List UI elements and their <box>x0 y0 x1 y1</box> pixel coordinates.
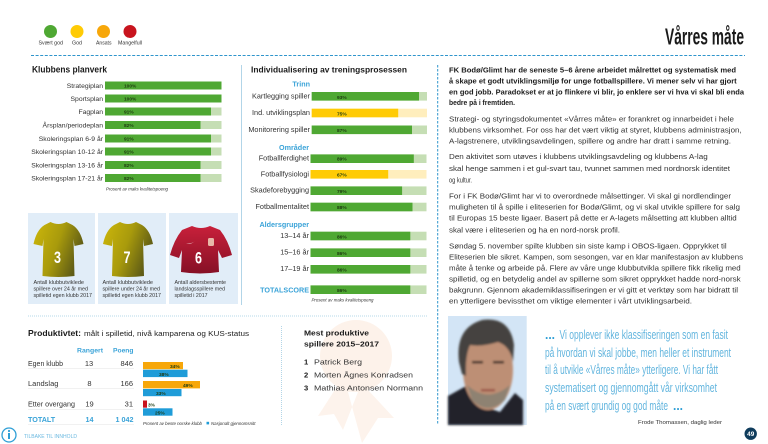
text block: paragraph 4: muligheten til å spille i eliteserien for Bodø/Glimt, og vi skal utvikle spillere for salg <box>449 204 740 212</box>
panel: shirt 3 <box>28 213 95 304</box>
icon: rosette <box>318 320 394 443</box>
bar chart: aldersgrupper: 15–16 år <box>280 248 310 256</box>
caption: landslagsspillere med <box>174 286 225 292</box>
icon: info back link: TILBAKE TIL INNHOLD <box>24 434 77 440</box>
caption <box>102 280 161 299</box>
player list: Morten Ågnes Konradsen <box>314 370 413 380</box>
player list <box>304 358 423 392</box>
bar chart: trinn: Trinn <box>292 80 310 88</box>
quote: ... <box>545 327 555 342</box>
bar chart: områder: 67% <box>337 172 347 178</box>
page number: 49 <box>747 431 755 438</box>
bar chart: productivity: 33% <box>156 391 166 397</box>
text block: intro: en god jobb. Paradokset er at jo flinkere vi blir, jo enklere ser vi hva vi skal bli enda <box>449 89 744 96</box>
legend note: Nasjonalt gjennomsnitt <box>211 421 256 426</box>
icon: red shirt 6: 6 <box>195 250 202 268</box>
bar chart: planverk: 100% <box>124 96 137 102</box>
table: TOTALT <box>28 415 56 424</box>
bar chart: planverk: 91% <box>124 109 134 115</box>
heading: spillere 2015–2017 <box>304 340 379 348</box>
quote: på en svært grundig og god måte <box>545 398 668 413</box>
table: 8 <box>87 379 92 388</box>
panel: Produktivitet: målt i spilletid, nivå kamparena og KUS-status <box>84 329 249 338</box>
bar chart: totalscore: TOTALSCORE <box>260 285 309 294</box>
legend note <box>143 421 256 426</box>
bar chart: trinn: Monitorering spiller <box>248 125 311 134</box>
bar chart: planverk: 82% <box>124 163 134 169</box>
table: 166 <box>120 379 133 388</box>
panel: Klubbens planverk <box>31 64 222 192</box>
table: Etter overgang <box>28 400 75 408</box>
bar chart: områder: Fotballferdighet <box>259 154 309 162</box>
note: Prosent av maks kvalitetspoeng <box>106 186 169 192</box>
bar chart: områder: Fotballmentalitet <box>255 202 309 211</box>
page number <box>744 428 757 440</box>
text block: paragraph 4: skal være i eliteserien og ha en nord-norsk profil. <box>449 227 620 234</box>
table: 19 <box>85 400 94 408</box>
caption: Antall aldersbestemte <box>174 280 226 286</box>
bar chart: aldersgrupper: 86% <box>337 234 347 240</box>
icon: yellow shirt 7: 7 <box>124 249 130 267</box>
bar chart: områder: Skadeforebygging <box>250 186 309 194</box>
player list: 2 <box>304 370 308 380</box>
bar chart: planverk: 82% <box>124 176 134 182</box>
note: Prosent av maks kvalitetspoeng <box>312 298 374 302</box>
caption: spilletid egen klubb 2017 <box>34 293 92 299</box>
bar chart: planverk: Strategiplan <box>67 83 103 90</box>
text block: paragraph 5: Søndag 5. november spilte klubben sin siste kamp i OBOS-ligaen. Opprykket til <box>449 243 727 250</box>
bar chart: planverk: 91% <box>124 136 134 142</box>
table: 1 042 <box>116 415 134 424</box>
text block: paragraph 3 <box>449 154 730 184</box>
player list: Patrick Berg <box>314 358 362 366</box>
quote: ... <box>673 398 683 413</box>
quote <box>545 327 731 413</box>
text block: paragraph 2: A-lagstrenere, utviklingsavdelingen, spillere og andre har dratt i samme retning. <box>449 139 731 146</box>
legend: Svært god <box>38 41 63 47</box>
text block: intro: bedre på i fremtiden. <box>449 99 515 107</box>
caption <box>174 280 226 299</box>
legend <box>38 25 142 47</box>
table: Rangert <box>77 348 104 354</box>
text block: paragraph 5 <box>449 243 744 305</box>
bar chart: trinn: 87% <box>337 128 347 134</box>
caption: spilletid egen klubb 2017 <box>102 293 161 299</box>
panel: shirt 6 <box>169 213 238 304</box>
bar chart: planverk: 100% <box>124 83 137 89</box>
text block: paragraph 5: Eliteserien ble sikret. Kampen, som sesongen, var en klar manifestasjon av klubbens <box>449 254 744 261</box>
bar chart: områder: 88% <box>337 205 347 211</box>
table: Landslag <box>28 379 58 388</box>
legend: Mangelfull <box>118 41 142 47</box>
panel: shirt 7 <box>98 213 166 304</box>
panel: Mest produktive spillere <box>304 328 423 392</box>
bar chart: aldersgrupper: 86% <box>337 268 347 274</box>
bar chart: trinn: 75% <box>337 112 347 118</box>
bar chart: planverk <box>31 82 222 182</box>
bar chart: productivity: 3% <box>148 402 156 408</box>
bar chart: planverk: 91% <box>124 149 134 155</box>
table: 31 <box>125 400 133 408</box>
bar chart: totalscore: 86% <box>337 288 347 294</box>
panel: Produktivitet <box>28 329 256 426</box>
bar chart: aldersgrupper: Aldersgrupper <box>259 220 309 229</box>
bar chart: planverk: Skoleringsplan 17-21 år <box>31 174 104 182</box>
bar chart: trinn: Ind. utviklingsplan <box>252 108 310 117</box>
bar chart: aldersgrupper <box>259 220 426 274</box>
bar chart: planverk: Skoleringsplan 6-9 år <box>39 135 104 143</box>
heading: Produktivtet: Produktivtet: <box>28 329 81 338</box>
bar chart: områder <box>250 143 426 211</box>
bar chart: planverk: Fagplan <box>78 109 103 116</box>
icon: info back link <box>2 428 77 442</box>
caption: spillere under 24 år med <box>102 286 160 292</box>
bar chart: productivity: 49% <box>183 383 193 389</box>
panel: Individualisering av treningsprosessen <box>248 64 427 302</box>
caption: spilletid i 2017 <box>174 293 208 299</box>
bar chart: trinn: 93% <box>337 95 347 101</box>
heading: Mest produktive <box>304 328 369 338</box>
bar chart: områder: 89% <box>337 157 347 163</box>
bar chart: productivity: 34% <box>170 364 180 370</box>
text block: paragraph 5: måte å tenke og arbeide på. Flere av våre unge klubbutvikla spillere fikk rikelig med <box>449 264 741 272</box>
bar chart: productivity: 25% <box>155 410 165 416</box>
bar chart: trinn: Kartlegging spiller <box>252 92 311 100</box>
legend: God <box>72 41 82 47</box>
text block: paragraph 5: en ytterligere bevissthet om viktige elementer i vårt utviklingsarbeid. <box>449 297 692 305</box>
text block: intro <box>449 66 744 107</box>
bar chart: planverk: Sportsplan <box>70 96 103 103</box>
bar chart: totalscore <box>260 285 426 294</box>
bar chart: aldersgrupper: 86% <box>337 251 347 257</box>
text block: paragraph 4: For i FK Bodø/Glimt har vi to overordnede målsettinger. Vi skal gi nordlendinger <box>449 192 732 200</box>
bar chart: områder: Områder <box>279 143 309 152</box>
heading: Individualisering: Individualisering av treningsprosessen <box>251 64 407 74</box>
text block: paragraph 2 <box>449 116 742 146</box>
player list: 1 <box>304 358 309 366</box>
bar chart: planverk: 82% <box>124 123 134 129</box>
bar chart: aldersgrupper: 13–14 år <box>280 231 310 240</box>
caption: Antall klubbutviklede <box>34 280 84 286</box>
table: 14 <box>86 415 94 424</box>
photo: Frode Thomassen <box>448 316 527 425</box>
text block: paragraph 3: og kultur. <box>449 177 472 184</box>
bar chart: planverk: Årsplan/periodeplan <box>43 120 103 130</box>
bar chart: aldersgrupper: 17–19 år <box>280 264 310 273</box>
text block: paragraph 3: skal henge sammen i et gul-svart tau, tvunnet sammen med nordnorsk identitet <box>449 166 730 173</box>
table: 846 <box>120 359 133 368</box>
quote attribution: Frode Thomassen, daglig leder <box>638 420 722 426</box>
heading <box>304 328 379 348</box>
caption <box>34 280 92 299</box>
text block: paragraph 5: bakgrunn. Gjennom akademiklassifiseringen er vi gitt et verktøy som har bidratt til <box>449 287 739 294</box>
text block: intro: FK Bodø/Glimt har de seneste 5–6 årene arbeidet målrettet og systematisk med <box>449 66 736 74</box>
caption: spillere over 24 år med <box>34 286 88 292</box>
bar chart: productivity: 38% <box>159 372 169 378</box>
text block: intro: å skape et godt utviklingsmiljø for unge fotballspillere. Vi mener selv vi har gjort <box>449 77 737 85</box>
table: Egen klubb <box>28 359 63 368</box>
text block: paragraph 3: Den aktivitet som utøves i klubbens utviklingsavdeling og klubbens A-lag <box>449 154 708 161</box>
table: Poeng <box>113 348 134 354</box>
player list: 3 <box>304 384 308 392</box>
bar chart: planverk: Skoleringsplan 10-12 år <box>31 148 104 156</box>
text block: paragraph 5: spilletid, og en betydelig andel av spillerne som sikret opprykket hadde nord-norsk <box>449 276 741 283</box>
text block: paragraph 2: Strategi- og styringsdokumentet «Vårres måte» er forankret og innarbeidet i hele <box>449 116 734 124</box>
bar chart: områder: 79% <box>337 189 347 195</box>
text block: paragraph 2: klubbens virksomhet. For oss har det vært viktig at styret, klubbens administrasjon, <box>449 127 742 134</box>
icon: yellow shirt 3: 3 <box>54 249 61 267</box>
bar chart: områder: Fotballfysiologi <box>261 170 309 178</box>
player list: Mathias Antonsen Normann <box>314 384 423 392</box>
bar chart: trinn <box>248 80 427 134</box>
caption: Antall klubbutviklede <box>102 280 153 286</box>
text block: paragraph 4 <box>449 192 740 234</box>
table: 13 <box>85 359 93 368</box>
bar chart: planverk: Skoleringsplan 13-16 år <box>31 162 104 170</box>
legend note: Prosent av beste norske klubb <box>143 421 203 426</box>
legend: Ansats <box>96 41 112 47</box>
bar chart: productivity <box>143 362 200 416</box>
text block: paragraph 4: til Europas 15 beste ligaer. Basert på dette er A-lagets målsetting att klubben alltid <box>449 214 737 222</box>
table <box>28 348 134 424</box>
heading: Klubbens planverk: Klubbens planverk <box>32 64 107 74</box>
